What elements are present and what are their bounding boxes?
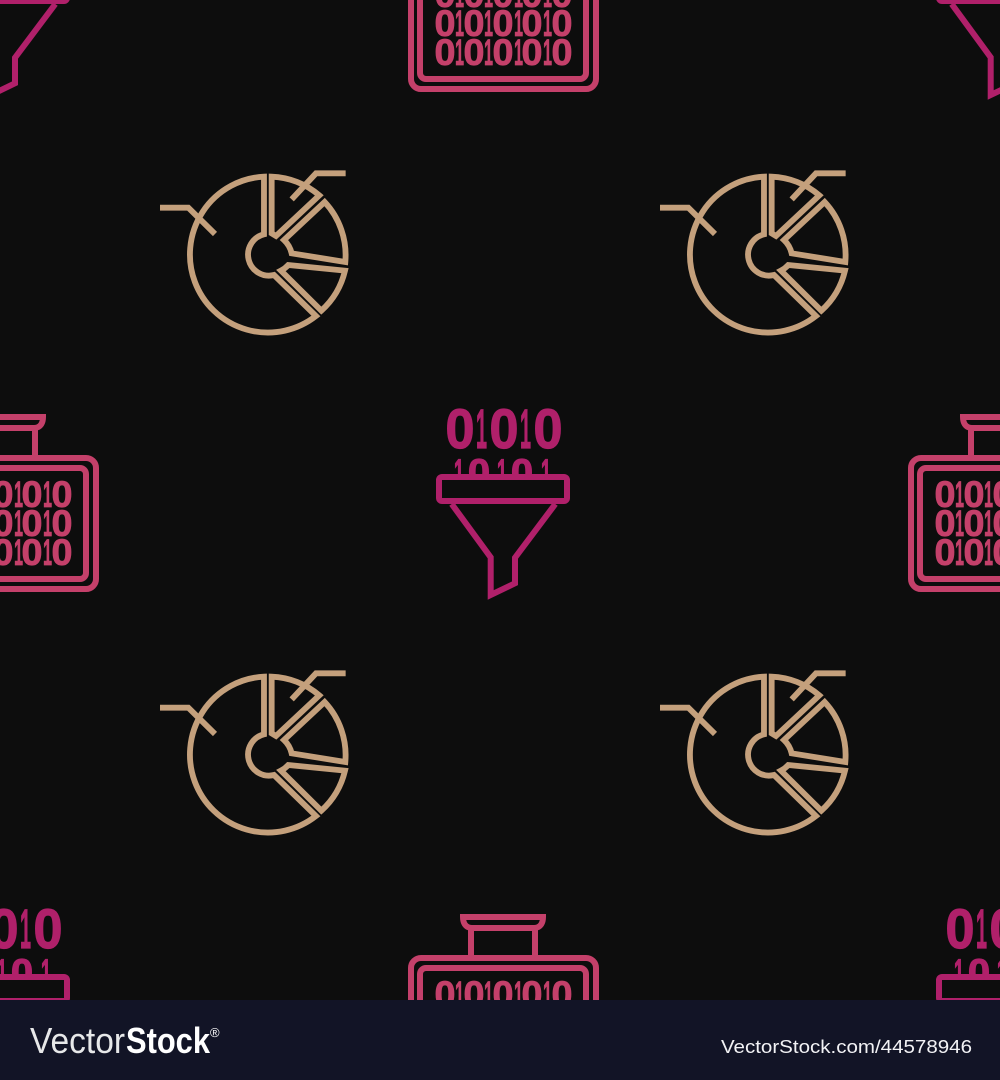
icon: binary funnel top right [939, 0, 1000, 95]
icon: binary funnel bottom right: 1 [954, 952, 964, 993]
icon: pie chart bottom left [160, 673, 346, 833]
icon: binary server left: 0 [52, 474, 72, 515]
icon: binary server top: 1 [484, 32, 493, 73]
icon: binary funnel bottom right [939, 897, 1000, 1001]
icon: binary server bottom: 0 [434, 974, 456, 1015]
icon: binary funnel top left [0, 0, 67, 95]
icon: binary server bottom: 0 [552, 974, 572, 1015]
icon: binary funnel center: 0 [490, 397, 518, 460]
icon: binary funnel center: 1 [476, 397, 487, 460]
icon: binary funnel center: 1 [454, 452, 464, 493]
icon: binary server top [411, 0, 596, 89]
icon: binary server top: 0 [522, 3, 542, 44]
icon: binary server top: 0 [552, 32, 572, 73]
icon: binary server bottom: 0 [492, 974, 514, 1015]
icon: binary funnel bottom right: 0 [968, 952, 990, 993]
VectorStock logo: Vector [30, 1020, 125, 1061]
icon: binary server left: 0 [22, 503, 42, 544]
icon: binary server bottom: 1 [455, 974, 464, 1015]
icon: binary server right: 0 [934, 474, 956, 515]
icon: binary funnel center: 0 [534, 397, 562, 460]
icon: binary server right [911, 417, 1000, 589]
icon: binary server right: 0 [964, 503, 984, 544]
icon: binary server right: 0 [964, 474, 984, 515]
icon: binary server left: 1 [43, 532, 52, 573]
icon: binary funnel center: 1 [520, 397, 531, 460]
icon: pie chart top left [160, 173, 346, 333]
icon: binary server bottom [411, 917, 596, 1080]
icon: binary server left: 1 [43, 474, 52, 515]
icon: binary server top: 0 [464, 32, 484, 73]
icon: binary server top: 0 [464, 3, 484, 44]
image id text: VectorStock.com/44578946 [721, 1036, 972, 1057]
icon: binary server left: 0 [52, 532, 72, 573]
icon: binary server bottom: 0 [464, 974, 484, 1015]
icon: binary server left: 1 [43, 503, 52, 544]
icon: binary funnel center: 0 [468, 452, 490, 493]
icon: binary funnel center: 1 [541, 452, 551, 493]
icon: binary funnel bottom left: 1 [41, 952, 51, 993]
icon: binary server top: 0 [492, 32, 514, 73]
icon: binary server top: 1 [455, 3, 464, 44]
icon: binary server top: 0 [522, 32, 542, 73]
icon: binary server top: 1 [455, 32, 464, 73]
icon: pie chart top right [660, 173, 846, 333]
icon: binary funnel center: 0 [511, 452, 533, 493]
icon: binary server bottom: 1 [484, 974, 493, 1015]
VectorStock logo: Stock [126, 1020, 211, 1061]
icon: binary funnel center [439, 397, 567, 595]
icon: binary server right: 0 [934, 503, 956, 544]
icon: binary server right: 0 [964, 532, 984, 573]
icon: binary server top: 1 [484, 3, 493, 44]
icon: binary server left: 0 [22, 474, 42, 515]
icon: binary server right: 1 [955, 474, 964, 515]
footer bar [0, 1000, 1000, 1080]
icon: pie chart bottom right [660, 673, 846, 833]
icon: binary server top: 1 [514, 32, 523, 73]
VectorStock logo: ® [210, 1025, 220, 1040]
icon: binary server right: 0 [934, 532, 956, 573]
icon: binary funnel center: 0 [446, 397, 474, 460]
icon: binary funnel bottom left [0, 897, 67, 1001]
icon: binary server top: 0 [434, 32, 456, 73]
icon: binary funnel bottom left: 1 [20, 897, 31, 960]
icon: binary funnel bottom right: 0 [946, 897, 974, 960]
icon: binary server bottom: 1 [514, 974, 523, 1015]
icon: binary funnel bottom left: 0 [34, 897, 62, 960]
icon: binary server top: 1 [514, 3, 523, 44]
icon: binary server bottom: 1 [543, 974, 552, 1015]
icon: binary server top: 0 [492, 3, 514, 44]
icon: binary server top: 0 [434, 3, 456, 44]
icon: binary server left: 1 [14, 532, 23, 573]
icon: binary server right: 1 [955, 532, 964, 573]
icon: binary funnel center: 1 [497, 452, 507, 493]
icon: binary server top: 1 [543, 32, 552, 73]
icon: binary server top: 0 [552, 3, 572, 44]
icon: binary server bottom: 0 [522, 974, 542, 1015]
icon: binary server left [0, 417, 96, 589]
icon: binary server left: 1 [14, 503, 23, 544]
icon: binary server right: 1 [955, 503, 964, 544]
icon: binary funnel bottom left: 0 [11, 952, 33, 993]
icon: binary server top: 1 [543, 3, 552, 44]
icon: binary server left: 0 [22, 532, 42, 573]
icon: binary server left: 1 [14, 474, 23, 515]
icon: binary server left: 0 [52, 503, 72, 544]
